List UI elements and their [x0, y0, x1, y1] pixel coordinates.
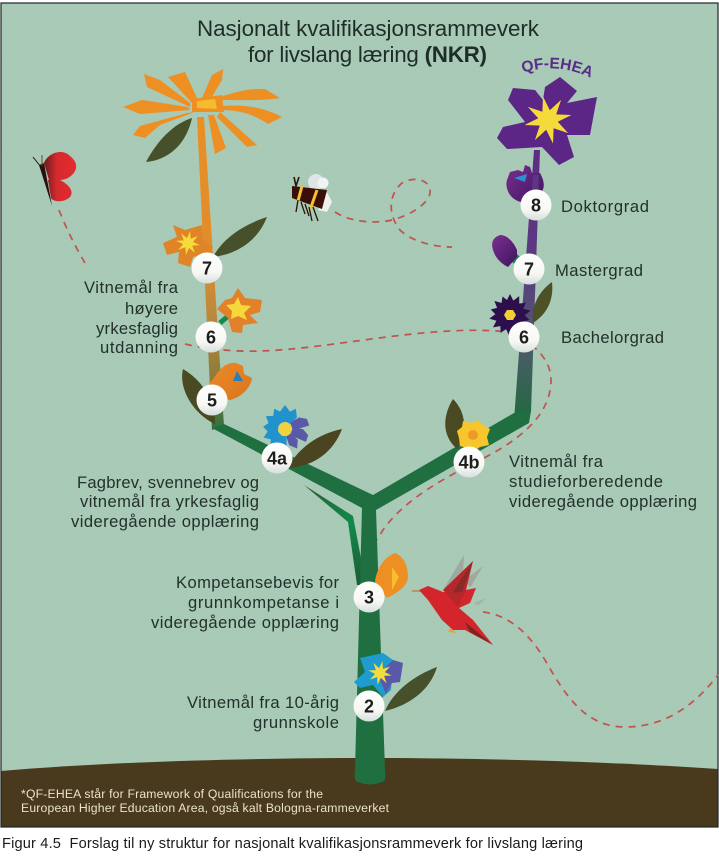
stem: side shoot	[304, 485, 366, 585]
leaf: level 6 right	[533, 282, 552, 323]
badge: 8: 8	[531, 196, 541, 216]
flower: big orange top flower	[123, 69, 282, 154]
label: 4a vocational upper secondary: Fagbrev, svennebrev og	[77, 473, 259, 492]
stem: orange vocational branch	[197, 117, 224, 430]
badge: 8	[520, 190, 552, 220]
label: 2 primary school: Vitnemål fra 10-årig	[187, 693, 339, 712]
label: 3 competence certificate: Kompetansebevis for	[176, 573, 339, 592]
flower: level 6 right dark purple	[489, 294, 531, 336]
leaf: level 5	[182, 369, 215, 424]
flower: level 4b yellow	[457, 420, 490, 451]
label: 4b general upper secondary: studieforberedende	[509, 472, 663, 491]
flower: level 6 left	[217, 288, 262, 333]
flower: QF-EHEA big purple	[497, 77, 597, 165]
badge: 4a: 4a	[267, 448, 288, 468]
leaf: level 4a	[288, 429, 342, 468]
badge: 7 left: 7	[202, 258, 212, 278]
flower: level 8 tulip	[506, 165, 544, 202]
label: 2 primary school	[187, 693, 339, 732]
footnote: European Higher Education Area, også kalt Bologna-rammeverket	[21, 801, 390, 815]
icon: butterfly	[33, 152, 76, 206]
stem: main green trunk and fork	[212, 411, 531, 784]
badge: 3	[354, 582, 384, 612]
badge: 6 right: 6	[519, 328, 529, 348]
badge: 4a	[262, 442, 292, 474]
title: Nasjonalt kvalifikasjonsrammeverk	[197, 16, 540, 41]
label: 4a vocational upper secondary: vitnemål fra yrkesfaglig	[80, 492, 259, 511]
badge: 5: 5	[207, 390, 217, 410]
badge: 4b: 4b	[458, 452, 480, 472]
dashed trail: bee	[335, 179, 452, 247]
label: Bachelorgrad: Bachelorgrad	[561, 328, 664, 347]
flower: level 4a blue	[262, 405, 310, 452]
stem: purple academic branch	[514, 150, 540, 420]
badge: 7 right: 7	[524, 260, 534, 280]
leaf: at level 7 left	[213, 217, 267, 257]
flower: level 5 tulip	[209, 363, 252, 400]
flower: level 7 left	[163, 225, 213, 267]
flower: level 3 orange	[375, 553, 408, 598]
label: 3 competence certificate: grunnkompetanse i	[188, 593, 339, 612]
flower: level 2 blue	[354, 653, 403, 697]
label: 4b general upper secondary	[509, 452, 697, 511]
title	[197, 16, 540, 67]
badge: 5	[196, 384, 228, 416]
dashed trail: hummingbird	[483, 612, 718, 727]
badge: 4b	[454, 446, 484, 478]
footnote: *QF-EHEA står for Framework of Qualifications for the	[21, 787, 323, 801]
badge: 2: 2	[364, 696, 374, 716]
label: 2 primary school: grunnskole	[253, 713, 339, 732]
label: 4b general upper secondary: Vitnemål fra	[509, 452, 604, 471]
dashed trail: butterfly	[59, 210, 85, 263]
icon: hummingbird	[412, 555, 493, 645]
badge: 6 left: 6	[206, 328, 216, 348]
label: 4a vocational upper secondary: videregående opplæring	[71, 512, 259, 531]
label: vocational higher education	[84, 278, 179, 357]
label: vocational higher education: høyere	[125, 299, 178, 318]
label: 4b general upper secondary: videregående opplæring	[509, 492, 697, 511]
leaf: level 2	[385, 667, 437, 711]
footnote	[21, 787, 390, 815]
badge: 3: 3	[364, 588, 374, 608]
badge: 7 right	[514, 254, 544, 284]
label: 4a vocational upper secondary	[71, 473, 259, 531]
badge: 2	[354, 690, 384, 722]
label: vocational higher education: Vitnemål fra	[84, 278, 179, 297]
flower: level 7 right tulip	[492, 235, 518, 267]
dashed trail: long route between branches	[185, 330, 551, 540]
label: vocational higher education: utdanning	[100, 338, 178, 357]
badge: 6 left	[196, 322, 226, 352]
title: for livslang læring (NKR)	[248, 42, 487, 67]
label: Mastergrad: Mastergrad	[555, 261, 643, 280]
label: vocational higher education: yrkesfaglig	[96, 319, 178, 338]
leaf: top orange flower	[146, 118, 192, 162]
badge: 6 right	[508, 322, 540, 352]
leaf: level 4b	[445, 399, 464, 449]
label: 3 competence certificate	[151, 573, 339, 632]
label: QF-EHEA: QF-EHEA	[522, 58, 591, 78]
badge: 7 left	[192, 252, 222, 284]
caption: Figur 4.5 Forslag til ny struktur for nasjonalt kvalifikasjonsrammeverk for livslang læring	[2, 836, 583, 852]
label: Doktorgrad: Doktorgrad	[561, 197, 649, 216]
icon: bee	[292, 174, 332, 221]
label: 3 competence certificate: videregående opplæring	[151, 613, 339, 632]
ground	[1, 758, 718, 827]
